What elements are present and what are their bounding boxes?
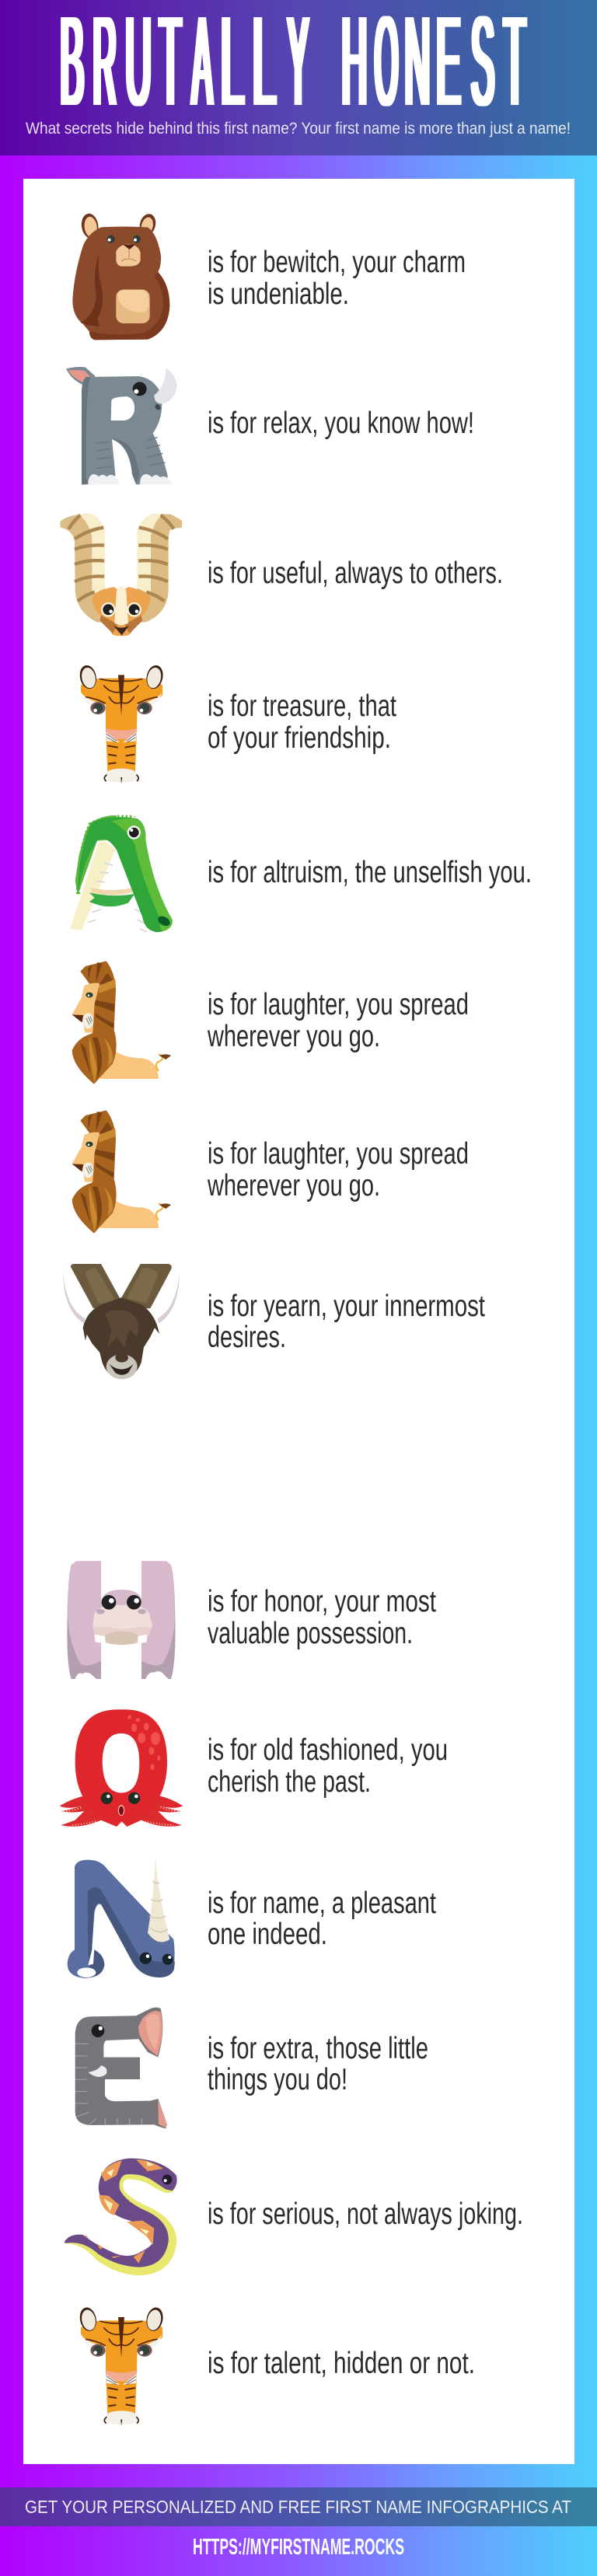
icon: lion letter L [72, 961, 171, 1084]
text: O line 2: cherish the past. [208, 1765, 371, 1799]
row: E elephant [75, 2007, 428, 2128]
text: L line 1: is for laughter, you spread [208, 988, 469, 1021]
row: H hippo [67, 1561, 436, 1679]
text: L line 2: wherever you go. [207, 1169, 380, 1202]
row: Y yak [63, 1264, 485, 1379]
text: T line 2: of your friendship. [208, 721, 391, 755]
text: L line 1: is for laughter, you spread [208, 1137, 469, 1171]
text: B line 1: is for bewitch, your charm [208, 246, 466, 279]
text: O line 1: is for old fashioned, you [208, 1733, 448, 1767]
icon: octopus letter O [60, 1709, 183, 1827]
text: H line 1: is for honor, your most [208, 1585, 436, 1618]
text: E line 1: is for extra, those little [208, 2032, 428, 2065]
row: B bear [72, 212, 466, 340]
icon: tiger letter T [78, 664, 165, 784]
icon: hippo letter H [67, 1561, 176, 1679]
row: S snake [65, 2159, 523, 2275]
text: T line 1: is for treasure, that [208, 689, 396, 723]
icon: bear letter B [72, 212, 169, 340]
row: T tiger second [78, 2306, 475, 2426]
header band [0, 0, 597, 155]
row: O octopus [60, 1709, 448, 1827]
text: T: is for talent, hidden or not. [208, 2347, 475, 2380]
icon: snake letter S [65, 2159, 177, 2275]
icon: narwhal letter N [68, 1856, 175, 1978]
text: E line 2: things you do! [208, 2063, 347, 2096]
row: N narwhal [68, 1856, 436, 1978]
icon: crocodile letter A [70, 815, 173, 932]
row: L lion first [72, 961, 469, 1084]
row: T tiger [78, 664, 396, 784]
text: N line 1: is for name, a pleasant [208, 1887, 436, 1920]
icon: rhino letter R [66, 367, 177, 484]
row: L lion second [72, 1110, 469, 1234]
text: Y line 2: desires. [208, 1321, 286, 1354]
text: Y line 1: is for yearn, your innermost [208, 1290, 485, 1323]
row: R rhino [66, 367, 474, 484]
icon: antelope letter U [61, 514, 182, 636]
text: U: is for useful, always to others. [208, 557, 503, 590]
icon: lion letter L [72, 1110, 171, 1234]
row: U antelope [61, 514, 503, 636]
footer url: HTTPS://MYFIRSTNAME.ROCKS [193, 2535, 404, 2560]
footer band [0, 2487, 597, 2526]
text: L line 2: wherever you go. [207, 1020, 380, 1053]
icon: elephant letter E [75, 2007, 167, 2128]
icon: yak letter Y [63, 1264, 180, 1379]
text: H line 2: valuable possession. [208, 1617, 413, 1650]
row: A crocodile [70, 815, 532, 932]
title [60, 0, 525, 132]
text: N line 2: one indeed. [208, 1918, 327, 1951]
icon: tiger letter T [78, 2306, 165, 2426]
text: B line 2: is undeniable. [208, 277, 349, 311]
text: R: is for relax, you know how! [208, 407, 474, 440]
